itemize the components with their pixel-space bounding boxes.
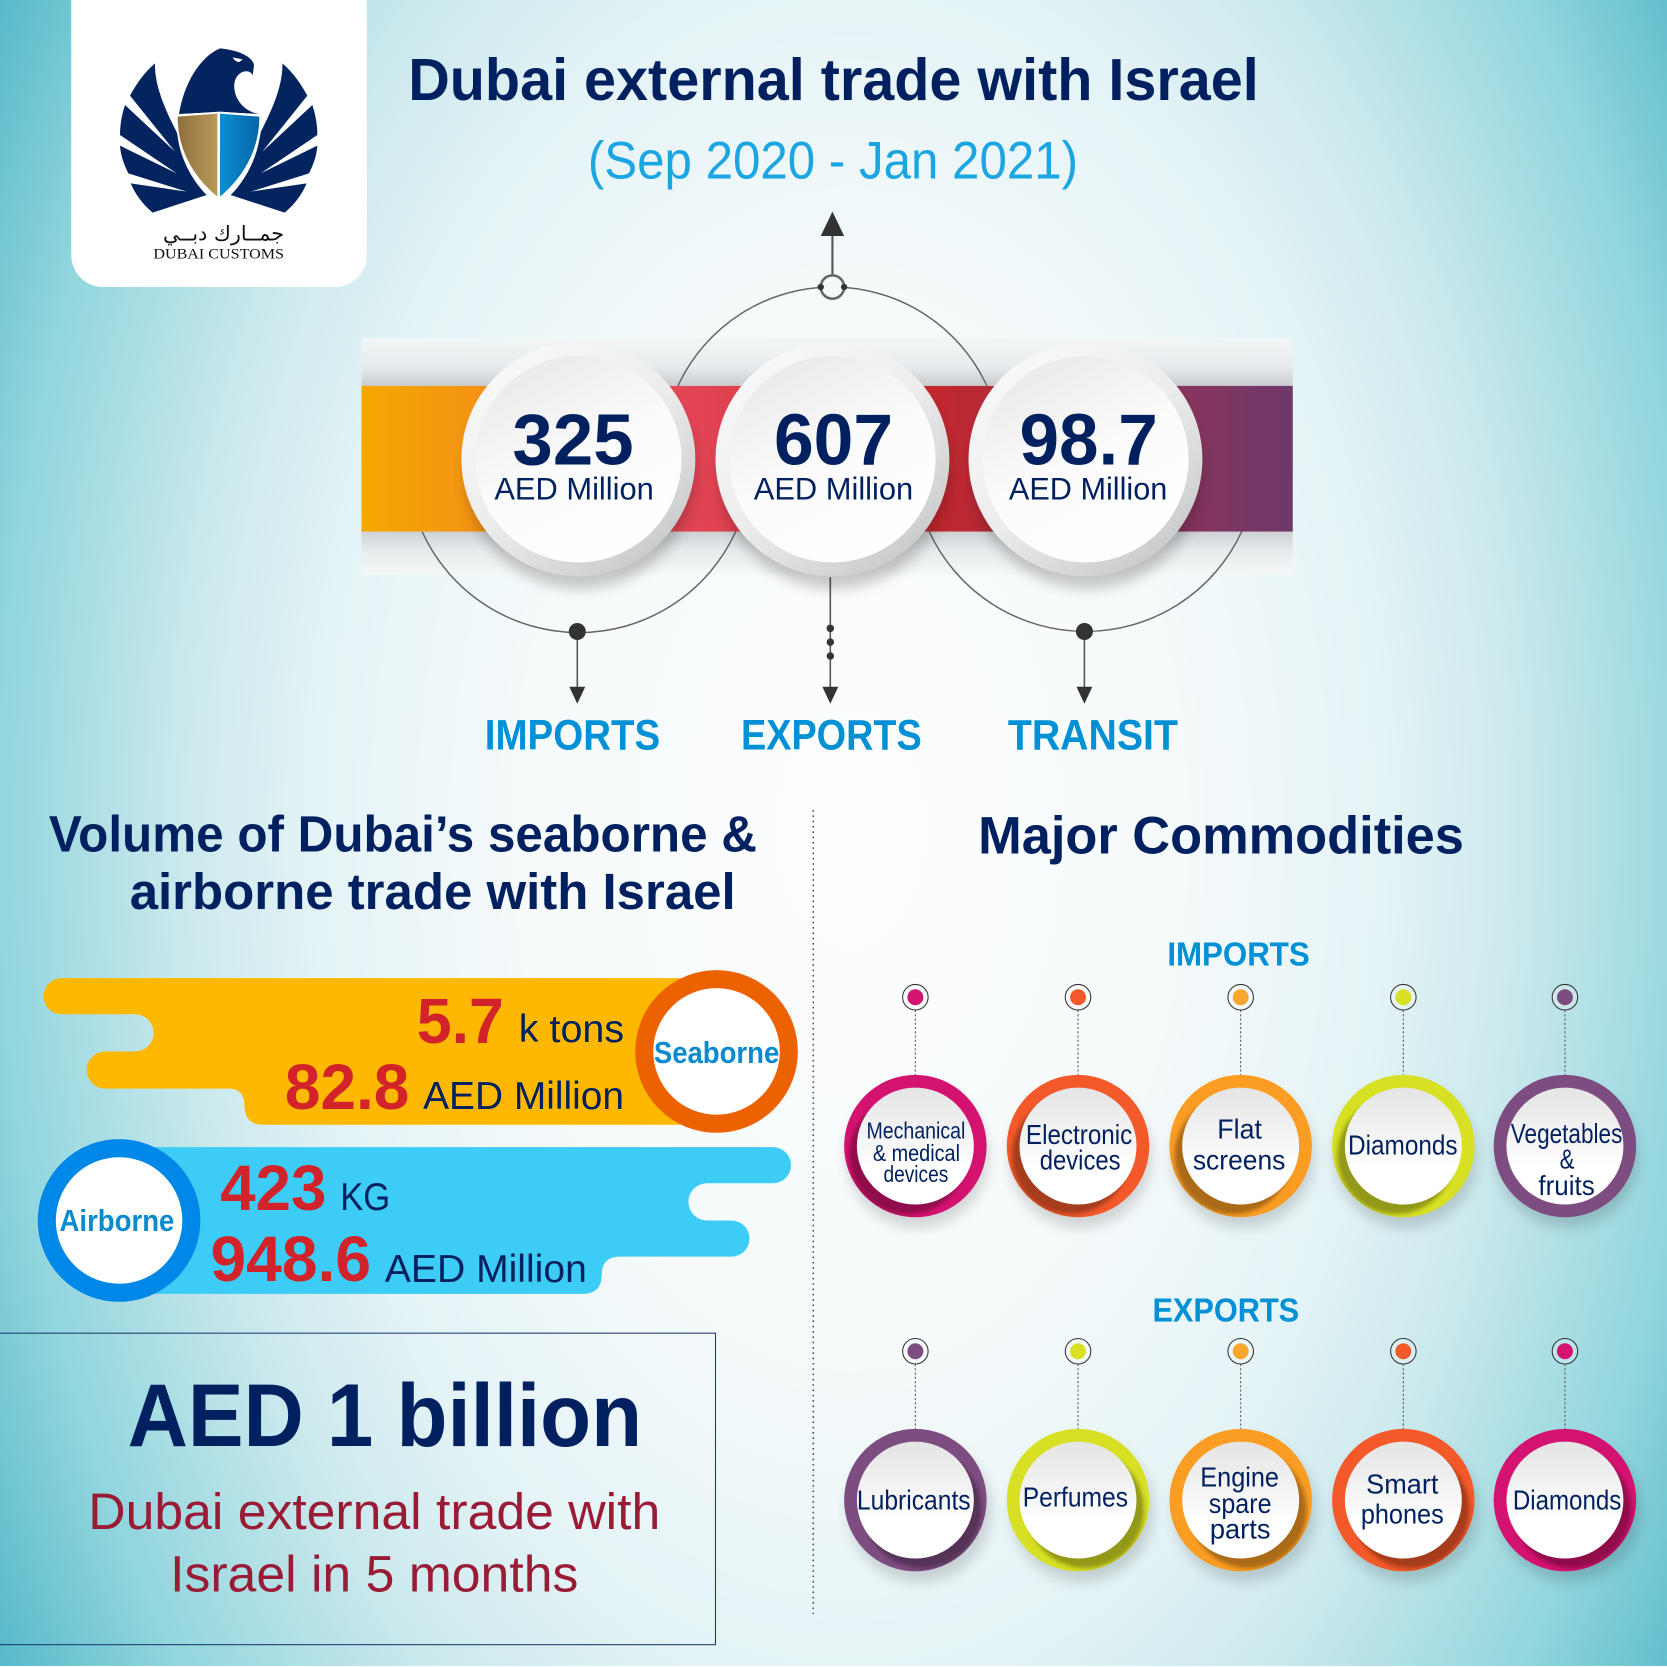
commodity: engine spare parts: parts	[1210, 1513, 1270, 1544]
commodity: mechanical and medical devices: devices	[883, 1161, 948, 1187]
seaborne tons: 5.7	[417, 985, 504, 1057]
commodity: perfumes: Perfumes	[1023, 1481, 1128, 1512]
label: transit: TRANSIT	[1008, 713, 1178, 760]
panel: seaborne	[44, 978, 789, 1125]
airborne value: 948.6	[211, 1223, 371, 1295]
commodity: engine spare parts	[1169, 1338, 1316, 1582]
subtitle: (Sep 2020 - Jan 2021)	[588, 132, 1078, 191]
label: exports: EXPORTS	[741, 713, 922, 760]
panel: total trade callout: AED 1 billion	[128, 1365, 642, 1465]
airborne weight: KG	[340, 1175, 390, 1219]
commodity: vegetables and fruits: fruits	[1538, 1170, 1595, 1201]
imports value circle: AED Million	[494, 471, 654, 507]
commodity: flat screens: screens	[1193, 1144, 1285, 1175]
panel: total trade callout	[0, 1333, 715, 1645]
top arrow	[821, 212, 844, 274]
commodity: smart phones: Smart	[1366, 1469, 1439, 1500]
commodity: diamonds export	[1494, 1338, 1640, 1582]
seaborne badge	[644, 979, 789, 1124]
commodity: diamonds import: Diamonds	[1348, 1130, 1458, 1161]
exports value circle	[715, 342, 949, 589]
commodity: electronic devices: Electronic	[1026, 1119, 1132, 1150]
top connector node	[818, 275, 847, 299]
heading: commodity imports: IMPORTS	[1167, 935, 1310, 972]
imports value circle	[461, 342, 695, 589]
commodity: vegetables and fruits: Vegetables	[1511, 1118, 1622, 1149]
airborne weight: 423	[220, 1152, 326, 1224]
logo English wordmark: DUBAI CUSTOMS	[153, 246, 284, 262]
airborne badge	[47, 1148, 191, 1293]
title: Dubai external trade with Israel	[408, 46, 1259, 113]
transit value circle: AED Million	[1009, 471, 1167, 507]
heading: major commodities: Major Commodities	[978, 807, 1464, 866]
imports arrow	[569, 623, 586, 704]
heading: seaborne and airborne volume	[49, 806, 757, 920]
commodity: flat screens: Flat	[1217, 1114, 1262, 1145]
transit value circle: 98.7	[1020, 401, 1158, 481]
exports value circle: AED Million	[754, 471, 913, 507]
logo card	[71, 0, 367, 287]
commodity: electronic devices: devices	[1040, 1144, 1121, 1175]
airborne badge: Airborne	[60, 1203, 174, 1238]
commodity: electronic devices	[1007, 984, 1151, 1228]
panel: total trade callout: Dubai external trade with	[88, 1483, 660, 1540]
exports value circle: 607	[774, 401, 893, 481]
commodity: smart phones	[1332, 1338, 1479, 1582]
seaborne value: AED Million	[423, 1074, 624, 1118]
commodity: vegetables and fruits: &	[1560, 1143, 1575, 1174]
commodity: flat screens	[1169, 984, 1314, 1228]
commodity: mechanical and medical devices	[844, 984, 989, 1228]
heading: seaborne and airborne volume: airborne trade with Israel	[130, 863, 736, 920]
seaborne value: 82.8	[285, 1051, 409, 1123]
commodity: mechanical and medical devices: & medical	[873, 1140, 960, 1166]
commodity: mechanical and medical devices: Mechanical	[866, 1118, 965, 1144]
commodity: smart phones: phones	[1361, 1498, 1444, 1529]
panel: total trade callout: Israel in 5 months	[170, 1546, 578, 1603]
connector arcs	[422, 287, 1242, 633]
heading: commodity exports: EXPORTS	[1152, 1291, 1299, 1328]
commodity: diamonds export: Diamonds	[1513, 1485, 1621, 1516]
exports arrow	[822, 577, 838, 704]
transit arrow	[1076, 623, 1093, 704]
commodity: lubricants	[844, 1338, 991, 1582]
logo Arabic wordmark: جمــارك دبــي	[163, 222, 284, 246]
commodity: vegetables and fruits	[1494, 984, 1638, 1228]
airborne value: AED Million	[385, 1247, 587, 1291]
heading: seaborne and airborne volume: Volume of Dubai’s seaborne &	[49, 806, 757, 863]
commodity: perfumes	[1007, 1338, 1154, 1582]
imports value circle: 325	[512, 401, 634, 481]
seaborne badge: Seaborne	[654, 1035, 779, 1070]
colour band	[361, 386, 1293, 532]
commodity: lubricants: Lubricants	[857, 1485, 971, 1516]
commodity: engine spare parts: spare	[1209, 1488, 1272, 1519]
logo: Dubai Customs eagle	[120, 48, 317, 262]
panel: airborne	[47, 1147, 791, 1295]
seaborne tons: k tons	[519, 1007, 624, 1051]
label: imports: IMPORTS	[485, 713, 660, 760]
band shadow panel	[361, 338, 1293, 575]
seaborne tons	[417, 985, 624, 1057]
airborne value	[211, 1223, 587, 1295]
commodity: diamonds import	[1332, 984, 1477, 1228]
seaborne value	[285, 1051, 624, 1123]
commodity: engine spare parts: Engine	[1200, 1461, 1279, 1492]
transit value circle	[969, 342, 1202, 589]
airborne weight	[220, 1152, 390, 1224]
